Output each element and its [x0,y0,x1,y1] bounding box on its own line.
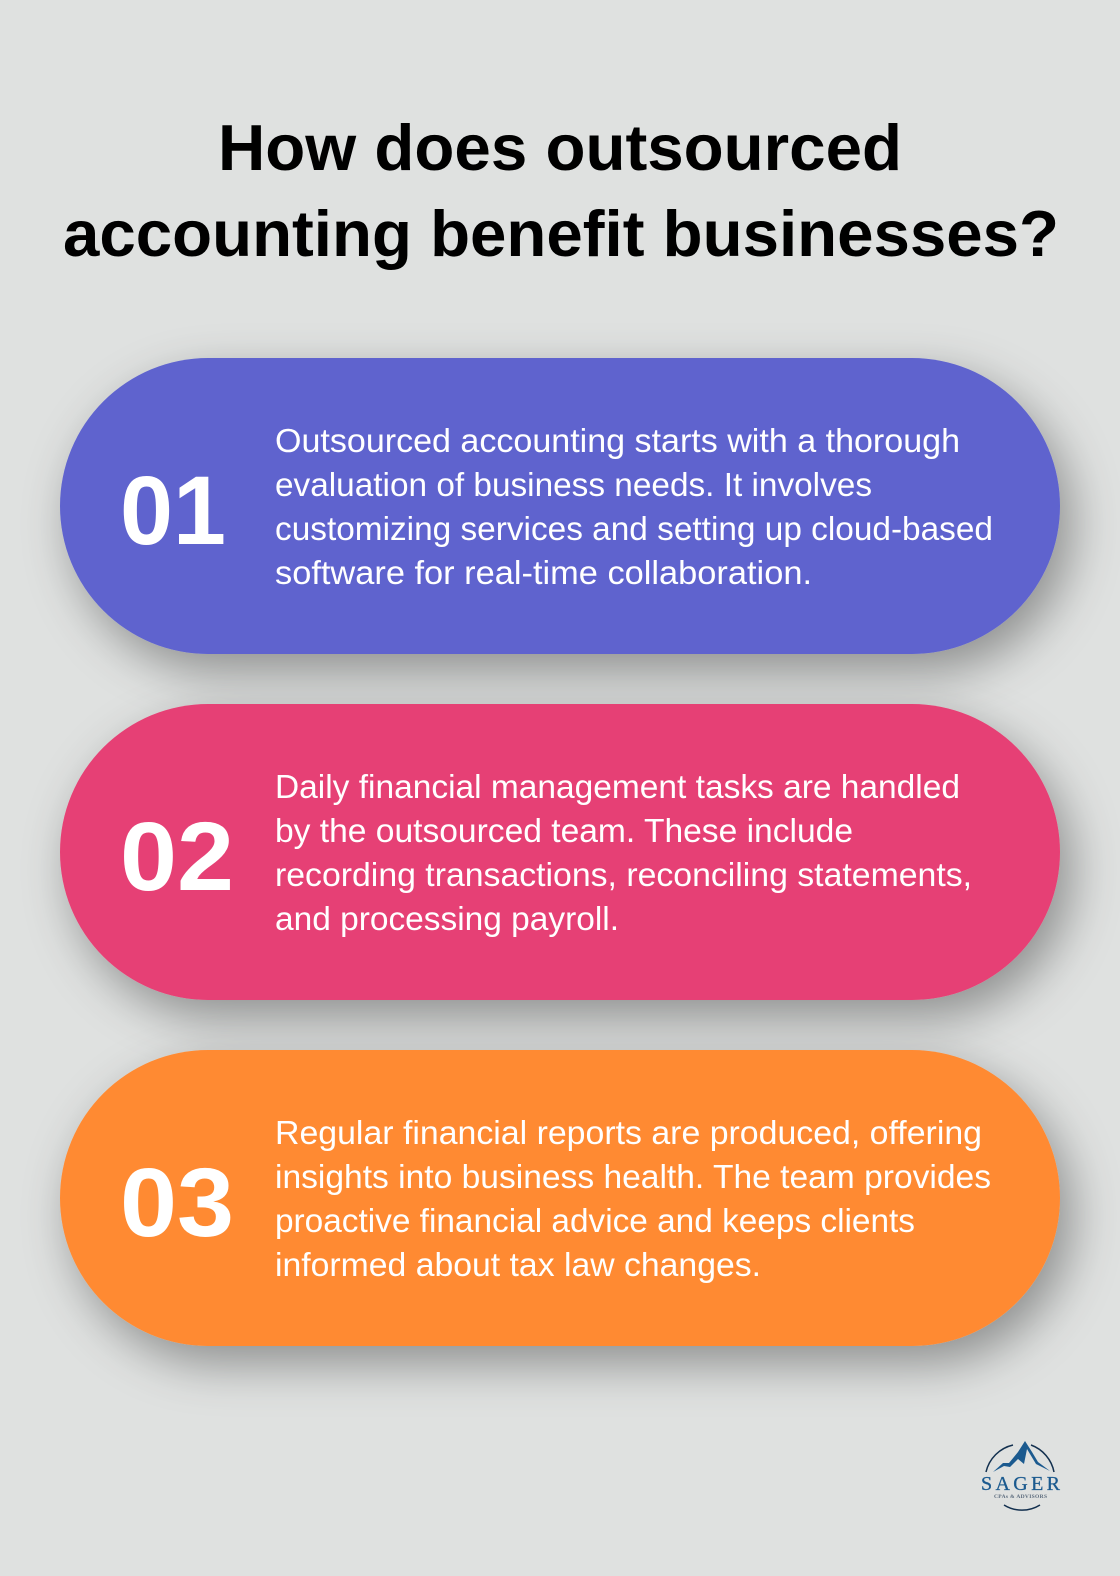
panel: step 03 [60,1050,1060,1346]
text block 01: software for real-time collaboration. [275,554,812,591]
text block 01: Outsourced accounting starts with a thorough [275,422,960,459]
logo wordmark: SAGER [981,1473,1061,1495]
text block 02: by the outsourced team. These include [275,812,853,849]
text block 03: proactive financial advice and keeps clients [275,1202,915,1239]
text block 02: and processing payroll. [275,900,619,937]
text block 03: informed about tax law changes. [275,1246,761,1283]
text block 03: Regular financial reports are produced, offering [275,1114,982,1151]
logo mountain [993,1441,1050,1472]
text block 03: insights into business health. The team provides [275,1158,991,1195]
title: How does outsourced [218,111,902,184]
text block 03 [275,1114,991,1283]
logo ring arcs [986,1445,1054,1510]
logo tagline: CPAs & ADVISORS [994,1494,1047,1500]
pill background 02 [60,704,1060,1000]
title: accounting benefit businesses? [63,197,1059,270]
number 03: 03 [120,1148,234,1257]
title [63,111,1059,270]
text block 02 [275,768,972,937]
text block 01: evaluation of business needs. It involves [275,466,872,503]
text block 02: recording transactions, reconciling statements, [275,856,972,893]
text block 01 [275,422,993,591]
number 01: 01 [120,456,226,565]
text block 02: Daily financial management tasks are handled [275,768,960,805]
text block 01: customizing services and setting up cloud-based [275,510,993,547]
panel: step 01 [60,358,1060,654]
icon: Sager logo [981,1441,1061,1510]
pill background 03 [60,1050,1060,1346]
number 02: 02 [120,802,234,911]
pill background 01 [60,358,1060,654]
panel: step 02 [60,704,1060,1000]
